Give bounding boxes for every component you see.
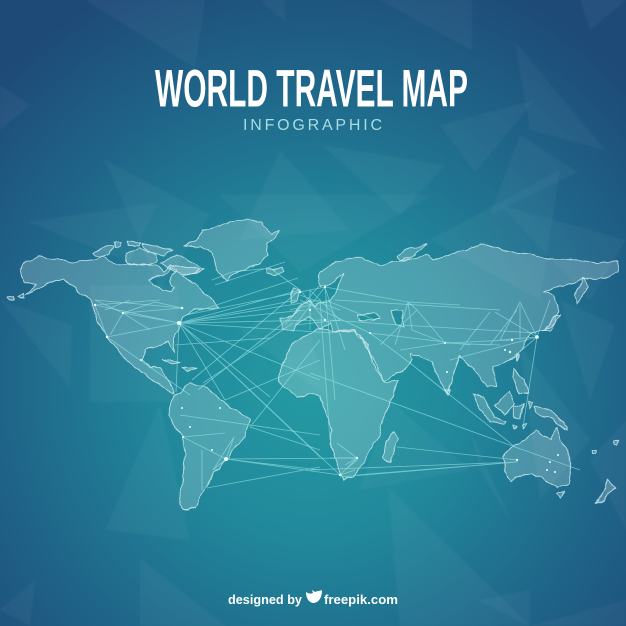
South America (168, 383, 250, 510)
Taiwan and Sri Lanka (445, 354, 519, 395)
Africa (278, 328, 398, 479)
Alaska islands (7, 293, 25, 300)
Sulawesi (513, 403, 523, 418)
Japan (543, 315, 561, 330)
credit (228, 590, 398, 607)
icon: freepik logo (306, 590, 322, 603)
map: Americas (7, 219, 283, 510)
small islands (513, 402, 532, 429)
Iceland (266, 268, 283, 275)
credit: designed by (228, 592, 303, 607)
subtitle: INFOGRAPHIC (243, 117, 382, 134)
route network lines (95, 262, 580, 490)
New Zealand (595, 480, 615, 504)
Australia (503, 427, 572, 488)
Philippines (513, 368, 528, 393)
Arctic islands (93, 241, 204, 273)
Kamchatka (575, 278, 588, 305)
Borneo (495, 392, 515, 415)
Pacific islands (592, 440, 618, 454)
Novaya Zemlya (397, 245, 427, 261)
map: Old World (278, 244, 618, 504)
Great Britain and Ireland (290, 287, 299, 304)
world map landmasses (7, 219, 618, 510)
city dots (94, 286, 559, 476)
New Guinea (533, 407, 567, 430)
Caribbean islands (163, 358, 197, 371)
credit: freepik.com (324, 592, 398, 607)
North America (20, 257, 218, 392)
Sumatra and Java (473, 395, 507, 425)
Greenland (183, 219, 278, 282)
Madagascar (384, 432, 397, 462)
Eurasia (280, 244, 618, 393)
Tasmania (557, 492, 565, 498)
